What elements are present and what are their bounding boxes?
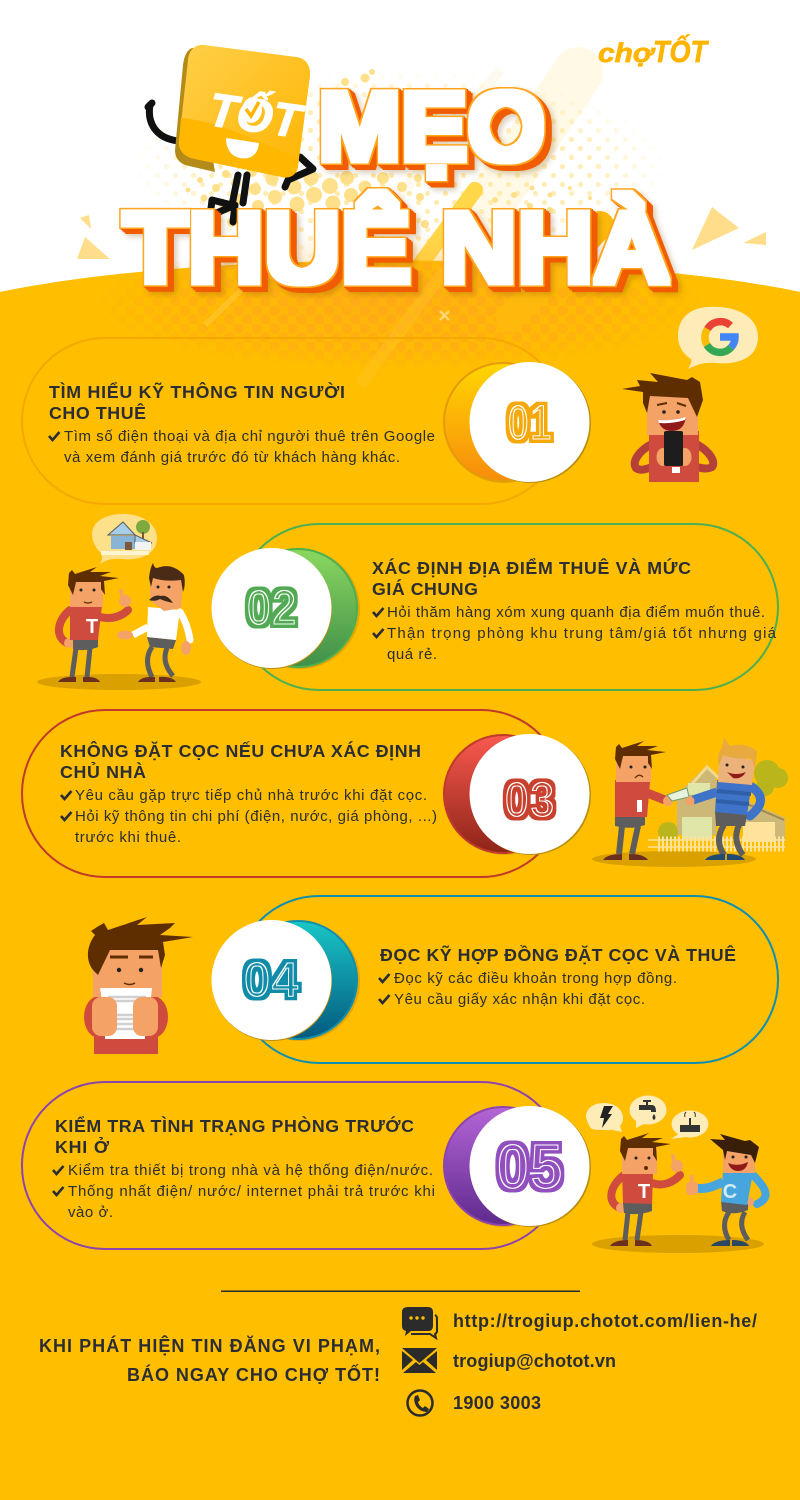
panel 02: text: XÁC ĐỊNH ĐỊA ĐIỂM THUÊ VÀ MỨC xyxy=(372,557,691,578)
footer message xyxy=(39,1335,380,1385)
icon: phone xyxy=(408,1390,432,1416)
panel 01: text: và xem đánh giá trước đó từ khách hàng khác. xyxy=(64,449,400,466)
triangle decorations xyxy=(77,207,766,259)
mascot side edge xyxy=(175,48,215,172)
panel 05: outline xyxy=(22,1082,564,1249)
panel 03: text: CHỦ NHÀ xyxy=(60,761,146,782)
panel 03: number badge: 03 xyxy=(504,771,555,828)
panel 05: text: Kiểm tra thiết bị trong nhà và hệ thống điện/nước. xyxy=(68,1162,433,1179)
sad man xyxy=(627,785,665,800)
mascot: TỐT square character xyxy=(148,45,313,222)
blond man xyxy=(693,792,717,800)
panel 02: text: GIÁ CHUNG xyxy=(372,578,478,599)
panel 02: text: quá rẻ. xyxy=(387,646,437,663)
mascot word TỐT: TỐT xyxy=(206,82,308,148)
panel 03: text: KHÔNG ĐẶT CỌC NẾU CHƯA XÁC ĐỊNH xyxy=(60,740,421,761)
T man xyxy=(59,610,70,643)
logo: chợ TỐT xyxy=(598,33,710,69)
panel 03: text: trước khi thuê. xyxy=(75,829,181,846)
halftone dots xyxy=(186,69,592,246)
T man xyxy=(611,1175,624,1208)
C man xyxy=(696,1182,723,1189)
contact phone: 1900 3003 xyxy=(453,1393,541,1413)
panel 04: number badge xyxy=(212,920,360,1041)
panel 01: text: Tìm số điện thoại và địa chỉ người thuê trên Google xyxy=(64,428,435,445)
bubble: electricity xyxy=(586,1103,623,1132)
panel 05: text: vào ở. xyxy=(68,1204,113,1221)
panel 01: character with Google bubble xyxy=(622,307,758,482)
panel 01: text: CHO THUÊ xyxy=(49,402,146,423)
person xyxy=(635,445,655,470)
footer divider xyxy=(221,1290,580,1292)
ground shadow xyxy=(37,674,201,690)
bubble: water tap xyxy=(630,1096,666,1128)
panel 02: two characters with house bubble: T xyxy=(86,616,98,638)
moustache man xyxy=(180,612,190,640)
panel 05: text: KIỂM TRA TÌNH TRẠNG PHÒNG TRƯỚC xyxy=(55,1115,414,1136)
panel 04: text: ĐỌC KỸ HỢP ĐỒNG ĐẶT CỌC VÀ THUÊ xyxy=(380,944,736,965)
mascot smile xyxy=(226,138,259,158)
panel 03: characters exchanging money by a house xyxy=(592,738,788,867)
title line 1: MẸO xyxy=(318,72,545,181)
panel 02: two characters with house bubble xyxy=(37,514,201,690)
panel 04: text xyxy=(379,944,736,1008)
contact email: trogiup@chotot.vn xyxy=(453,1351,616,1371)
icon: chat xyxy=(402,1307,437,1338)
panel 02: text: Hỏi thăm hàng xóm xung quanh địa điểm muốn thuê. xyxy=(387,604,765,621)
panel 03: text xyxy=(60,740,437,846)
panel 05: number badge xyxy=(444,1106,591,1227)
logo: chợ TỐT: TỐT xyxy=(653,33,710,69)
panel 02: text: Thận trọng phòng khu trung tâm/giá tốt nhưng giá xyxy=(387,625,777,642)
panel 01: number badge xyxy=(444,362,591,483)
mascot limbs xyxy=(148,103,313,222)
panel 04: outline xyxy=(236,896,778,1063)
panel 01: text: TÌM HIỂU KỸ THÔNG TIN NGƯỜI xyxy=(49,381,345,402)
panel 03: outline xyxy=(22,710,564,877)
icon: mail xyxy=(402,1348,437,1373)
panel 04: text: Yêu cầu giấy xác nhận khi đặt cọc. xyxy=(394,991,645,1008)
title xyxy=(123,72,670,304)
money xyxy=(667,788,689,801)
panel 03: text: Yêu cầu gặp trực tiếp chủ nhà trước khi đặt cọc. xyxy=(75,787,427,804)
mascot body xyxy=(179,45,310,177)
ground shadow xyxy=(592,1235,764,1253)
Google logo xyxy=(705,322,735,352)
speech bubble xyxy=(678,307,758,369)
house icon xyxy=(101,520,152,555)
header decoration xyxy=(0,69,800,420)
panel 04: number badge: 04 xyxy=(243,951,300,1008)
panel 01: number badge: 01 xyxy=(507,394,552,451)
panel 05: two characters with utility bubbles: C xyxy=(723,1181,737,1203)
panel 01: outline xyxy=(22,338,564,504)
panel 05: two characters with utility bubbles: T xyxy=(638,1181,650,1203)
panel 03: text: Hỏi kỹ thông tin chi phí (điện, nước, giá phòng, ...) xyxy=(75,808,437,825)
bubble: wifi router xyxy=(671,1110,708,1139)
panel 02: text xyxy=(372,557,777,663)
house and garden xyxy=(648,760,788,847)
panel 03: number badge xyxy=(444,734,591,855)
panel 02: number badge xyxy=(212,548,360,669)
panel 05: text: KHI Ở xyxy=(55,1136,110,1157)
contact link: http://trogiup.chotot.com/lien-he/ xyxy=(453,1311,757,1331)
panel 01: text xyxy=(49,381,435,466)
logo: chợ TỐT: chợ xyxy=(598,38,656,68)
title line 2: THUÊ NHÀ xyxy=(123,192,670,304)
panel 05: text xyxy=(53,1115,435,1221)
panel 05: two characters with utility bubbles xyxy=(586,1096,766,1253)
panel 05: text: Thống nhất điện/ nước/ internet phải trả trước khi xyxy=(68,1183,435,1200)
panel 05: number badge: 05 xyxy=(496,1130,563,1203)
speech bubble xyxy=(92,514,157,564)
panel 02: number badge: 02 xyxy=(246,579,297,636)
panel 04: character reading contract xyxy=(84,917,193,1054)
mascot check mark xyxy=(240,96,264,124)
panel 04: text: Đọc kỹ các điều khoản trong hợp đồng. xyxy=(394,970,677,987)
ground shadow xyxy=(592,851,756,867)
footer message: KHI PHÁT HIỆN TIN ĐĂNG VI PHẠM, xyxy=(39,1335,380,1356)
panel 02: outline xyxy=(236,524,778,690)
footer message: BÁO NGAY CHO CHỢ TỐT! xyxy=(127,1364,380,1385)
